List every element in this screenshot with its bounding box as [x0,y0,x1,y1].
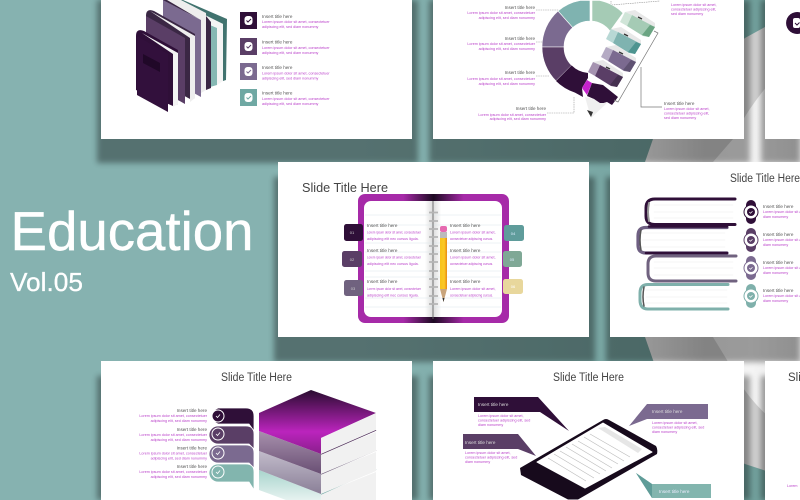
icon: check 3 [240,63,257,80]
badge text 4 [763,288,800,303]
tab 06 [503,279,523,294]
ribbon text 2: Insert title here [177,427,207,432]
panel: slide edge top right [765,0,800,139]
notebook text 6: Insert title here [450,279,481,284]
heading: Vol.05: Vol.05 [10,267,83,297]
label: top right: sed diam nonummy [671,12,703,16]
notebook text 2: Insert title here [367,248,398,253]
notebook text 3 [367,279,422,298]
text block 4: Insert title here [262,90,293,96]
pencil segment 1 [620,10,655,37]
text block 3: adipiscing elit, sed diam nonummy [262,76,319,80]
text block 3: Insert title here [262,65,293,70]
callout 1: Lorem ipsum dolor sit amet, [478,414,524,418]
pencil [440,226,447,302]
label: bottom right: Lorem ipsum dolor sit amet, [664,107,710,111]
label: bottom: Insert title here [516,106,546,111]
text block 4: Lorem ipsum dolor sit amet, consectetuer [262,97,330,101]
pencil segment 2 [606,27,641,54]
ribbon text 2: Lorem ipsum dolor sit amet, consectetuer [139,433,208,437]
ribbon text 2: adipiscing elit, sed diam nonummy [151,438,207,442]
callout 4 [636,473,711,498]
pencil segment 3 [601,45,636,72]
label: lower left: Insert title here [505,70,535,75]
label: top left: Insert title here [505,5,535,10]
notebook text 6: Lorem ipsum dolor sit amet, [450,287,496,291]
ribbon text 1: Insert title here [177,408,207,413]
label: lower left: Lorem ipsum dolor sit amet, consectetuer [467,77,536,81]
ribbon text 3 [139,446,208,460]
tab 01: 01 [350,230,355,235]
tab 05 [503,251,522,267]
icon: badge 3 [744,256,758,280]
badge text 1 [763,204,800,219]
label: lower left [467,70,536,86]
tab 04: 04 [511,231,516,236]
label: top right [671,3,716,16]
callout 1: consectetuer adipiscing elit, sed [478,418,530,422]
panel: slide edge bottom right [765,361,800,500]
ribbon text 3: Lorem ipsum dolor sit amet, consectetuer [139,452,208,456]
label: bottom right: sed diam nonummy [664,116,696,120]
notebook text 4 [450,223,496,241]
notebook text 3: Insert title here [367,279,398,284]
ribbon text 4 [139,464,208,479]
label: bottom: adipiscing elit, sed diam nonummy [490,117,546,121]
badge text 2: diam nonummy [763,243,788,247]
label: bottom right [664,101,710,120]
badge text 2 [763,232,800,247]
callout 2: Insert title here [465,440,496,445]
ribbon text 4: adipiscing elit, sed diam nonummy [151,475,207,479]
tab 02: 02 [350,257,355,262]
bracket line [614,31,662,107]
callout 2 [463,434,536,464]
slide title: Slide Title Here [553,372,624,384]
callout 1: diam nonummy [478,423,503,427]
callout 1: Insert title here [478,402,509,407]
notebook text 2 [367,248,422,266]
text block 1 [262,14,330,29]
panel: slide 3D book stack [101,361,412,500]
callout 3: Insert title here [652,409,683,414]
label: bottom right: Insert title here [664,101,695,106]
label: bottom [478,106,547,121]
badge text 3 [763,260,800,275]
notebook text 6 [450,279,496,298]
callout 2: Lorem ipsum dolor sit amet, [465,451,510,455]
donut chart [542,0,623,97]
notebook text 6: consectetuer adipiscing cursus. [450,294,493,298]
label: middle left: Lorem ipsum dolor sit amet, consectetuer [467,42,536,46]
callout 3 [629,404,708,434]
panel: slide pencil donut chart [433,0,744,139]
text block 3: Lorem ipsum dolor sit amet, consectetuer [262,72,330,76]
ribbon 3 [209,445,254,468]
label: top left: Lorem ipsum dolor sit amet, consectetuer [467,11,536,15]
badge text 1: Insert title here [763,204,794,209]
notebook text 1: Lorem ipsum dolor sit amet, consectetuer [367,230,422,234]
ribbon text 3: Insert title here [177,446,207,450]
callout 4: Insert title here [659,489,690,494]
book stack [638,199,736,309]
text block 4: adipiscing elit, sed diam nonummy [262,102,319,106]
tab 02 [342,251,362,267]
panel: slide stacked upright books [101,0,412,139]
ribbon text 3: adipiscing elit, sed diam nonummy [151,456,207,460]
label: top left: adipiscing elit, sed diam nonummy [479,16,535,20]
leader lines [536,1,660,113]
icon: badge 2 [744,228,758,252]
label: top right: Lorem ipsum dolor sit amet, [671,3,716,7]
text block 2: adipiscing elit, sed diam nonummy [262,51,319,55]
icon: badge 1 [744,200,758,224]
ribbon text 1: Lorem ipsum dolor sit amet, consectetuer [139,414,208,418]
notebook text 3: adipiscing elit nec cursus ligula. [367,294,419,298]
text block 2: Lorem ipsum dolor sit amet, consectetuer [262,46,330,50]
callout 1 [474,397,569,431]
badge text 4: diam nonummy [763,299,788,303]
icon: check 1 [240,12,257,29]
tab 03 [344,280,363,296]
text block 1: adipiscing elit, sed diam nonummy [262,25,319,29]
icon: round badge [786,12,800,34]
label: top right: consectetuer adipiscing elit, [671,8,716,12]
badge text 3: diam nonummy [763,271,788,275]
panel: slide tablet [433,361,744,500]
text block 4 [262,90,330,106]
callout 2: consectetuer adipiscing elit, sed [465,456,517,460]
notebook text 4: Insert title here [450,223,481,228]
label: middle left: adipiscing elit, sed diam nonummy [479,47,535,51]
notebook text 4: Lorem ipsum dolor sit amet, [450,230,496,234]
notebook text 5: Insert title here [450,248,481,253]
callout 3: consectetuer adipiscing elit, sed [652,426,704,430]
tab 01 [344,224,363,241]
tab 06: 06 [511,284,516,289]
panel: slide notebook [278,162,589,337]
icon: tablet [520,419,657,500]
label: lower left: adipiscing elit, sed diam nonummy [479,82,535,86]
notebook text 1: adipiscing elit nec cursus ligula. [367,237,419,241]
notebook [358,194,509,323]
text block 2: Insert title here [262,40,293,44]
notebook text 5: Lorem ipsum dolor sit amet, [450,256,496,260]
badge text 1: diam nonummy [763,215,788,219]
ribbon text 4: Insert title here [177,464,207,469]
notebook text 1 [367,223,422,241]
gray swoosh shape [640,16,800,482]
tab 04 [504,225,524,241]
panel: slide horizontal books [610,162,800,337]
ribbon text 4: Lorem ipsum dolor sit amet, consectetuer [139,470,208,474]
text block 3 [262,65,330,80]
heading: Education: Education [10,200,254,262]
label: top left [467,5,536,20]
label: middle left [467,36,536,51]
badge text 3: Insert title here [763,260,794,265]
notebook text 2: adipiscing elit nec cursus ligula. [367,262,419,266]
tab 05: 05 [510,257,515,262]
ribbon 4 [209,464,254,490]
callout 3: diam nonummy [652,430,677,434]
slide title: Slide Title Here [221,372,292,384]
ribbon 2 [209,426,254,449]
notebook text 1: Insert title here [367,223,398,228]
notebook text 4: consectetuer adipiscing cursus. [450,237,493,241]
ribbon 1 [212,408,254,431]
callout 3: Lorem ipsum dolor sit amet, [652,421,698,425]
icon: upright books [136,0,227,112]
badge text 4: Insert title here [763,288,794,293]
label: bottom right: consectetuer adipiscing elit, [664,112,709,116]
stacked 3D books [259,390,376,500]
notebook text 3: Lorem ipsum dolor sit amet, consectetuer [367,287,422,291]
ribbon text 1 [139,408,208,423]
partial text: Lorem [787,484,797,488]
icon: badge 4 [744,284,758,308]
label: middle left: Insert title here [505,36,535,41]
icon: check 2 [240,38,257,55]
pencil segment 4 [588,60,623,87]
callout 2: diam nonummy [465,460,490,464]
ribbon text 1: adipiscing elit, sed diam nonummy [151,419,207,423]
tab 03: 03 [351,286,356,291]
notebook text 2: Lorem ipsum dolor sit amet, consectetuer [367,256,422,260]
text block 1: Lorem ipsum dolor sit amet, consectetuer [262,20,330,24]
text block 2 [262,40,330,55]
text block 1: Insert title here [262,14,293,19]
notebook text 5: consectetuer adipiscing cursus. [450,262,493,266]
label: bottom: Lorem ipsum dolor sit amet, consectetuer [478,113,547,117]
icon: check 4 [240,89,257,106]
ribbon text 2 [139,427,208,442]
badge text 2: Insert title here [763,232,794,237]
slide title: Slide Title Here [302,180,388,195]
lighter swoosh band [713,50,800,440]
notebook text 5 [450,248,496,266]
pencil tip [582,80,618,118]
